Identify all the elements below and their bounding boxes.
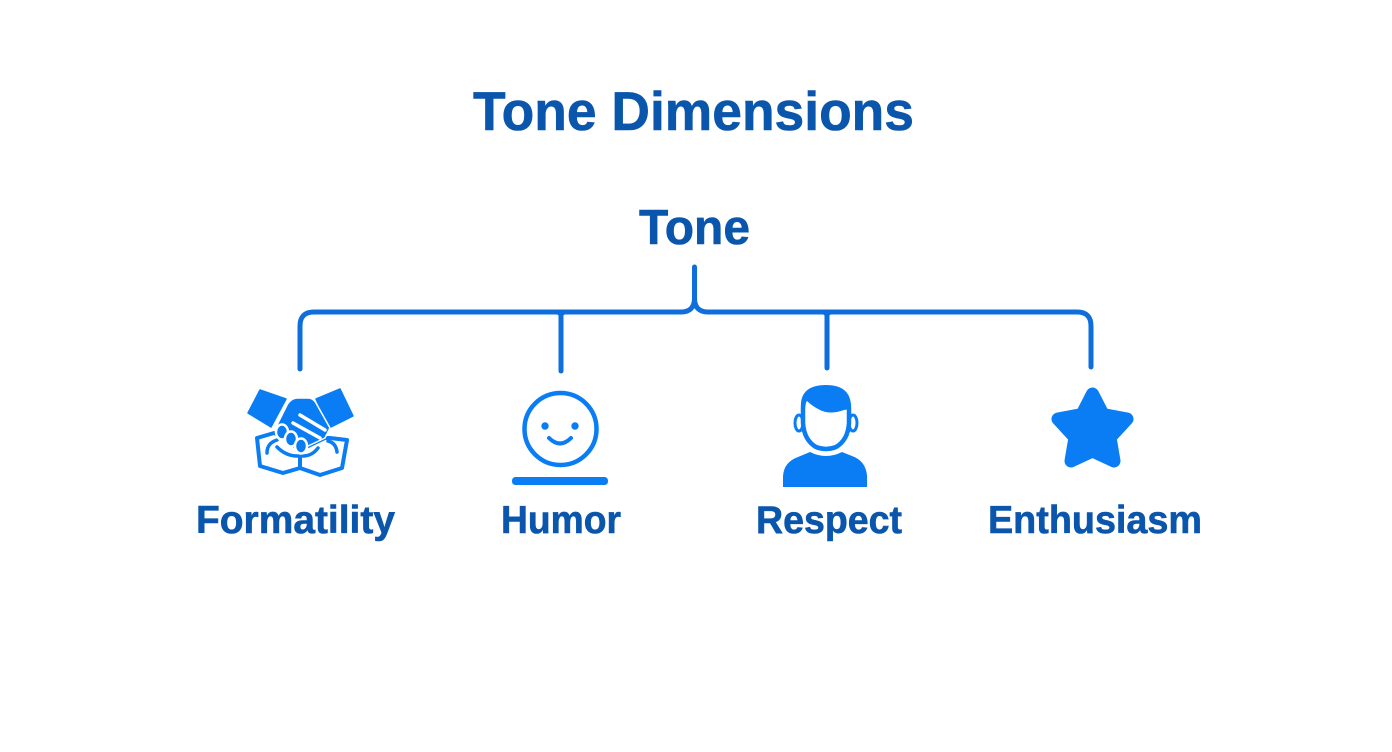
icon: handshake	[248, 389, 353, 475]
tree connector	[300, 267, 1091, 371]
icon: smiley face on a bar	[512, 393, 608, 485]
label: Enthusiasm: Enthusiasm	[988, 499, 1202, 542]
icon: person	[783, 385, 867, 487]
label: Respect: Respect	[756, 499, 902, 542]
root label: Tone: Tone	[639, 201, 750, 255]
label: Formatility: Formatility	[196, 499, 395, 542]
title: Tone Dimensions	[473, 80, 914, 142]
icon: star	[1058, 394, 1127, 461]
label: Humor: Humor	[501, 499, 621, 542]
